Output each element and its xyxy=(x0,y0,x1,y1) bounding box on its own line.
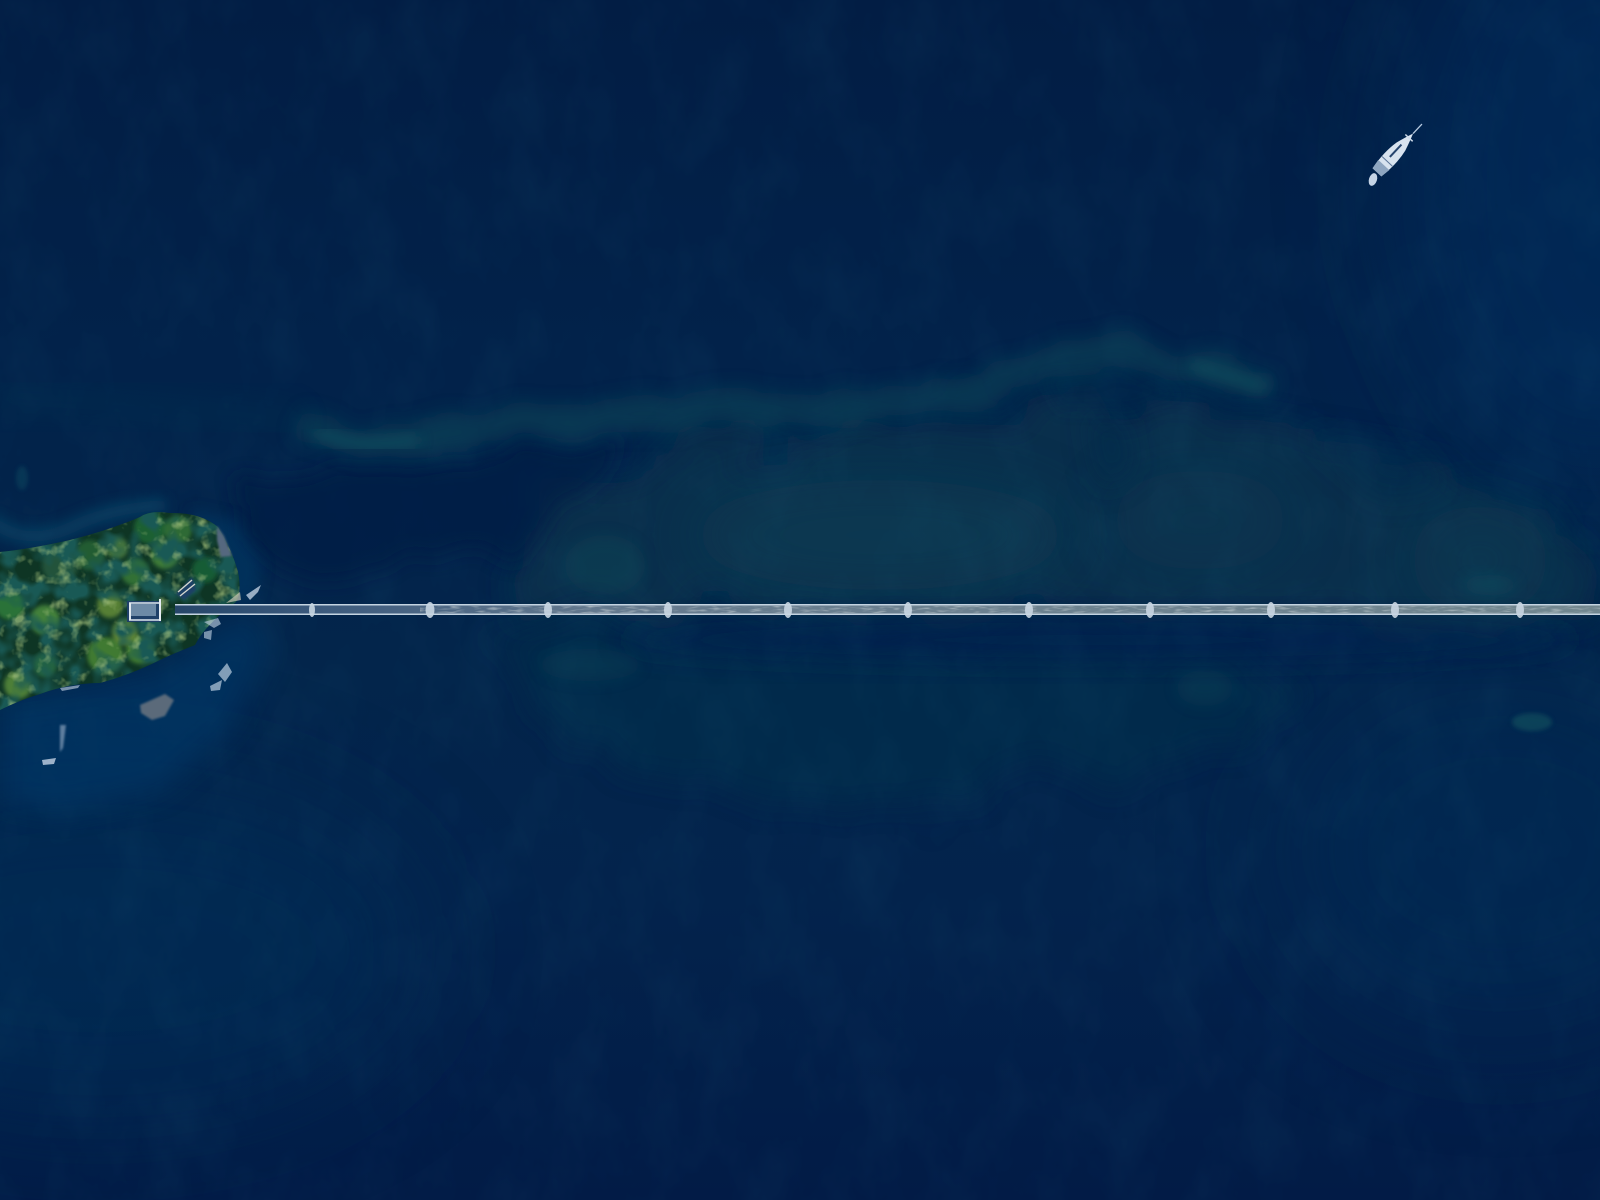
seabed shoal xyxy=(500,362,1600,810)
dinghy xyxy=(1367,172,1379,187)
bowsprit xyxy=(1413,124,1422,134)
hull xyxy=(1371,128,1419,177)
shallow water around island xyxy=(0,505,270,810)
island base xyxy=(0,512,240,710)
sand bar: teal band xyxy=(0,353,1265,444)
dark water below pier xyxy=(620,618,1580,662)
offshore rocks and foam xyxy=(42,585,261,765)
dark trench near island xyxy=(230,440,625,582)
tree canopy xyxy=(0,505,245,715)
pier xyxy=(175,602,1600,618)
sailboat xyxy=(1361,119,1428,189)
rocky shore xyxy=(217,526,232,557)
lighter reef patches xyxy=(16,466,1552,731)
pier pylons xyxy=(309,602,1524,618)
pier end platform xyxy=(127,599,161,622)
island xyxy=(0,505,245,715)
